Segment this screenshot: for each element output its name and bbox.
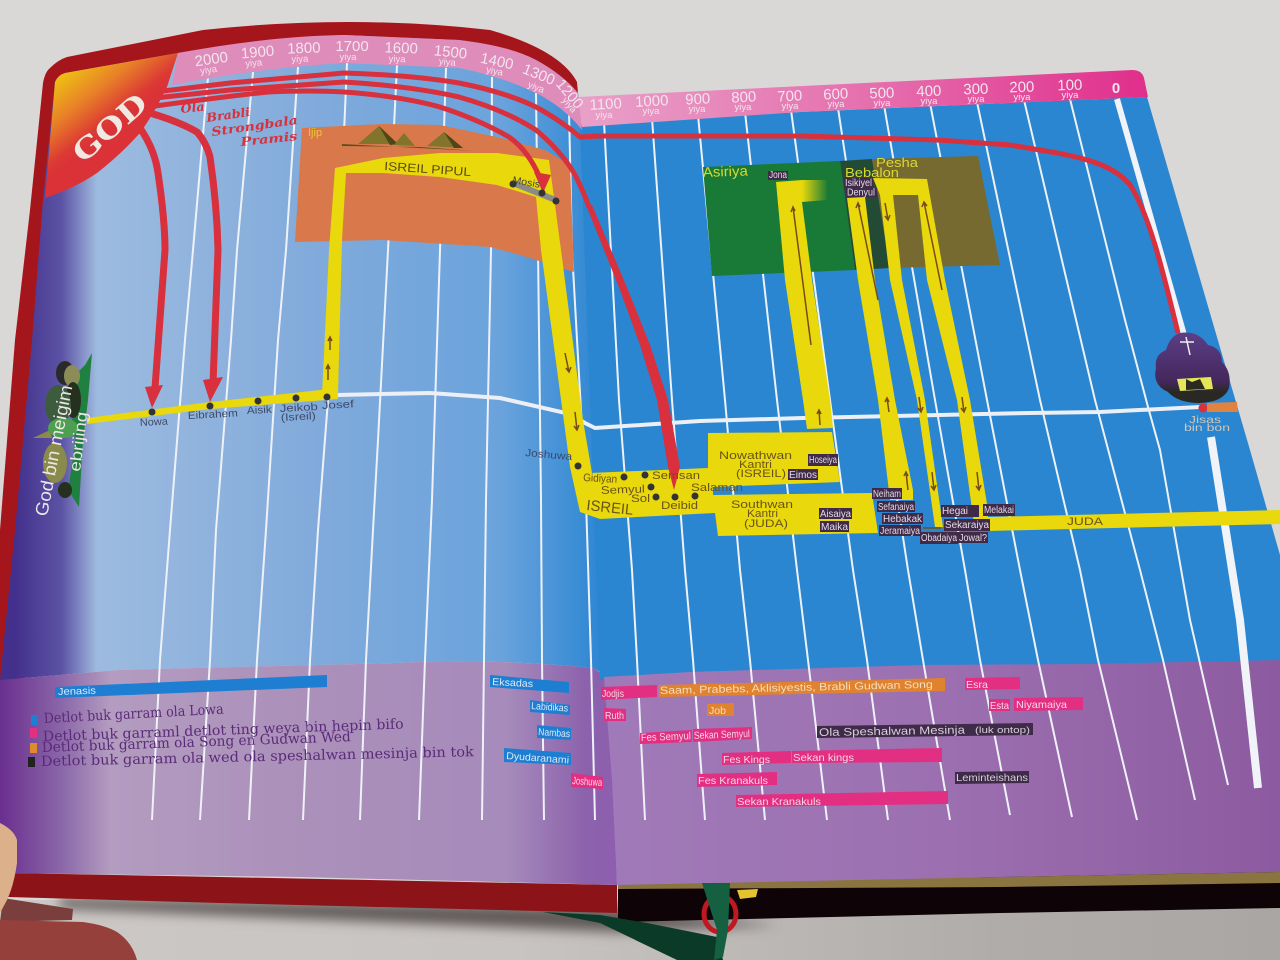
icon: trees with Creation label: ebrijing xyxy=(67,411,91,472)
prophet tags: Aisaiya xyxy=(820,509,851,520)
year labels right page: yiya xyxy=(1062,90,1079,101)
year labels left page: yiya xyxy=(291,54,309,65)
year labels left page: 1800 xyxy=(287,39,321,58)
label: Jisas bin bon: Jisas xyxy=(1189,414,1221,426)
label: Southwan Kantri: (JUDA) xyxy=(744,518,788,530)
pink years band right xyxy=(578,70,1148,127)
judges and kings dots and names: ISREIL xyxy=(586,497,634,519)
patriarch dots and names: Eibrahem xyxy=(188,407,238,422)
label: Southwan Kantri: Kantri xyxy=(747,508,778,520)
book bar: Esra: Esra xyxy=(966,679,988,691)
book bar: Ola Speshalwan Mesinja: Ola Speshalwan Mesinja xyxy=(819,724,966,739)
label: Southwan Kantri: Southwan xyxy=(731,499,793,511)
year labels left page: 1500 xyxy=(433,42,468,63)
book bar: Fes Kranakuls xyxy=(697,772,777,787)
prophet tags: Sekaraiya xyxy=(945,520,989,531)
legend: history books: Detlot buk garraml detlot ting weya bin hepin bifo xyxy=(43,716,404,745)
red arrow: to Deibid xyxy=(155,82,680,490)
year labels left page: yiya xyxy=(245,57,263,70)
label: Nowathwan Kantri: (ISREIL) xyxy=(736,468,786,480)
prophet tags: Maika xyxy=(821,522,848,533)
book bar: Eksadas: Eksadas xyxy=(492,677,533,690)
patriarch dots and names xyxy=(140,394,354,429)
year labels right page: yiya xyxy=(921,96,938,107)
judges and kings dots and names: Deibid xyxy=(661,500,698,512)
year labels right page: 1000 xyxy=(635,92,669,111)
panel: Egypt orange region xyxy=(295,124,574,272)
year labels left page: yiya xyxy=(388,54,406,65)
label: ISREIL PIPUL: ISREIL PIPUL xyxy=(384,159,472,179)
yellow path: exile column xyxy=(847,197,913,500)
year labels right page: yiya xyxy=(874,98,891,109)
year labels left page xyxy=(194,38,587,116)
patriarch dots and names: Jeikob xyxy=(280,401,318,415)
label: Jisas bin bon xyxy=(1184,414,1230,434)
year labels left page: yiya xyxy=(526,79,546,96)
book shadow xyxy=(60,898,780,932)
book bar: Nambas: Nambas xyxy=(538,727,570,740)
year labels right page: 100 xyxy=(1057,77,1083,94)
prophet tags: Melakai xyxy=(984,505,1014,516)
book bar: Fes Kranakuls: Fes Kranakuls xyxy=(698,775,768,787)
year labels right page: yiya xyxy=(689,104,706,115)
icon: pyramids xyxy=(342,126,476,151)
book bar: Fes Kings xyxy=(722,751,791,766)
Mosis marker xyxy=(510,175,560,204)
judges and kings dots and names: Salaman xyxy=(691,482,743,494)
book bar: Sekan Semyul: Sekan Semyul xyxy=(694,728,750,742)
Mosis marker: Mosis xyxy=(511,175,541,191)
right page xyxy=(580,97,1280,885)
year labels right page: 900 xyxy=(685,90,711,109)
year labels right page: yiya xyxy=(643,106,660,117)
judges and kings dots and names: Semyul xyxy=(601,483,645,497)
year labels right page: yiya xyxy=(782,101,799,112)
icon: nativity scene xyxy=(1155,332,1230,403)
label: Nowathwan Kantri xyxy=(719,450,792,480)
prophet tags: Sefanaiya xyxy=(878,502,914,513)
panel: Pesha olive region xyxy=(872,156,1000,268)
patriarch dots and names: Josef xyxy=(322,398,354,412)
year labels right page: 600 xyxy=(823,85,849,104)
labels: covenant words: Pramis xyxy=(239,129,298,149)
panel: Bebalon dark region xyxy=(840,159,890,270)
God corner xyxy=(45,53,178,198)
legend: songs and wisdom: Detlot buk garram ola Song en Gudwan Wed xyxy=(42,729,351,756)
book bar: Ola Speshalwan Mesinja: (luk ontop) xyxy=(975,725,1030,736)
prophet tags: Neiham xyxy=(873,489,901,500)
year labels right page: 700 xyxy=(777,87,803,106)
patriarch dots and names: Aisik xyxy=(247,404,273,417)
timeline grid lines xyxy=(152,63,1228,820)
year labels right page: 1100 xyxy=(589,95,622,114)
book bar: Jodjis: Jodjis xyxy=(602,688,624,700)
yellow timeline: creation to Josef xyxy=(87,390,338,424)
book bar: Sekan kings xyxy=(792,748,942,764)
year labels right page: yiya xyxy=(596,110,613,121)
label: Nowathwan Kantri: Nowathwan xyxy=(719,450,792,462)
prophet tags: Hegai xyxy=(942,506,968,517)
year labels right page: 0 xyxy=(1112,80,1120,97)
heading: GOD: GOD xyxy=(66,87,154,169)
book bar: Sekan kings: Sekan kings xyxy=(793,752,854,764)
red arrow: to Mosis xyxy=(155,91,551,193)
book bar: Niyamaiya xyxy=(1014,697,1083,711)
book bar: Esta: Esta xyxy=(990,700,1009,712)
book bar: Esra xyxy=(965,677,1020,691)
year zero thick line xyxy=(1117,99,1258,788)
red arrow: Brabli to Eibrahem xyxy=(150,113,223,402)
book bar: Ola Speshalwan Mesinja xyxy=(817,723,1033,739)
book bar: Leminteishans: Leminteishans xyxy=(956,772,1028,784)
book bar: Fes Semyul: Fes Semyul xyxy=(641,730,691,744)
left page xyxy=(0,35,617,885)
book bar: Job: Job xyxy=(709,705,726,717)
label: Pesha: Pesha xyxy=(876,155,919,170)
year labels right page: yiya xyxy=(968,94,985,105)
prophet tags: Hoseiya xyxy=(809,455,837,466)
prophet tags: Isikiyel xyxy=(845,178,872,189)
icon: trees with Creation label: God bin meigim xyxy=(31,383,76,518)
year labels right page: yiya xyxy=(828,99,845,110)
book bar: Jenasis: Jenasis xyxy=(58,686,96,698)
label: Nowathwan Kantri: Kantri xyxy=(739,459,772,471)
yellow path: to Asiriya xyxy=(776,180,833,429)
book bar: Sekan Kranakuls xyxy=(736,791,948,808)
label: JUDA: JUDA xyxy=(1067,516,1104,528)
red left cover xyxy=(0,22,582,700)
year labels right page: yiya xyxy=(1014,92,1031,103)
year labels left page: 1600 xyxy=(384,39,418,58)
year labels left page: 1300 xyxy=(520,61,557,89)
patriarch dots and names: Nowa xyxy=(140,416,168,429)
book bar: Joshuwa xyxy=(571,773,603,789)
year labels left page: 1700 xyxy=(335,38,369,55)
prophet tags: Jowal? xyxy=(959,533,987,544)
book bar: Jodjis xyxy=(601,685,657,700)
year labels right page: 200 xyxy=(1009,79,1035,96)
yellow path: return arch xyxy=(873,178,988,531)
direction arrows xyxy=(326,202,981,490)
hand holding the book xyxy=(0,823,137,960)
prophet tags: Jona xyxy=(769,170,787,181)
judges and kings dots and names xyxy=(525,447,743,519)
book bar: Sekan Kranakuls: Sekan Kranakuls xyxy=(737,796,821,808)
labels: covenant words: Ola xyxy=(180,100,205,116)
label: Asiriya: Asiriya xyxy=(703,162,748,180)
book bar: Job xyxy=(707,703,734,717)
book bar: wisdom books: Saam, Prabebs, Aklisiyestis, Brabli Gudwan Song xyxy=(660,679,933,697)
book bar: Labidikas: Labidikas xyxy=(531,701,568,715)
book bar: Ruth: Ruth xyxy=(605,710,624,722)
yellow path: Juda bar xyxy=(988,510,1280,531)
icon: trees with Creation label xyxy=(31,353,92,518)
labels: covenant words: Strongbala xyxy=(210,113,299,139)
year labels left page: yiya xyxy=(559,95,579,116)
label: Southwan Kantri xyxy=(731,499,793,530)
book bar: Dyudaranami: Dyudaranami xyxy=(506,751,569,766)
book bar: Jenasis xyxy=(55,675,327,698)
judges and kings dots and names: Sol xyxy=(631,493,650,505)
prophet tags: Jeramaiya xyxy=(880,526,920,537)
judges and kings dots and names: Gidiyan xyxy=(583,472,617,486)
prophet tags: Obadaiya xyxy=(921,533,957,544)
small connector arrow xyxy=(923,527,941,529)
patriarch dots and names: (Isreil) xyxy=(281,410,316,424)
panel: Asiriya green region xyxy=(703,161,855,276)
labels: covenant words xyxy=(180,100,299,149)
white horizontal timeline xyxy=(337,393,1200,428)
label: Jisas bin bon: bin bon xyxy=(1184,422,1230,434)
labels: covenant words: Brabli xyxy=(204,105,251,125)
label: Bebalon: Bebalon xyxy=(845,165,899,180)
yellow path: Isreil pipul arch xyxy=(322,153,878,536)
legend xyxy=(28,702,475,770)
red arrow: to Jisas xyxy=(155,73,1178,333)
year labels right page: yiya xyxy=(735,102,752,113)
red arrow: Ola to Nowa xyxy=(140,128,165,408)
legend: law books: Detlot buk garram ola Lowa xyxy=(43,702,224,727)
year labels left page: yiya xyxy=(438,56,457,69)
year labels right page: 300 xyxy=(963,81,989,98)
God gradient corner xyxy=(45,53,178,198)
ribbon bookmarks xyxy=(543,883,758,960)
year labels right page: 800 xyxy=(731,88,757,107)
Jisas birth marker xyxy=(1198,402,1238,412)
book bar: Fes Kings: Fes Kings xyxy=(723,754,770,766)
right page purple field xyxy=(604,660,1280,885)
prophet tags: Hebakak xyxy=(883,514,923,525)
prophet tags: Eimos xyxy=(789,470,817,481)
year labels left page: yiya xyxy=(340,52,357,63)
right page blue field xyxy=(580,97,1280,680)
judges and kings dots and names: Semsan xyxy=(652,470,700,482)
red cover bottom edge xyxy=(8,873,617,913)
label: Ijip: Ijip xyxy=(308,127,322,139)
year labels left page: 1400 xyxy=(479,50,515,73)
year labels left page: 2000 xyxy=(194,49,229,70)
year labels left page: yiya xyxy=(200,64,218,77)
year labels left page: yiya xyxy=(485,64,505,79)
table lower tone xyxy=(0,900,1280,960)
dark book block and cover on the right xyxy=(618,870,1280,922)
year labels right page: 500 xyxy=(869,85,895,102)
book bar: Eksadas xyxy=(490,675,569,693)
legend: prophets: Detlot buk garram ola wed ola speshalwan mesinja bin tok xyxy=(41,744,475,770)
left page purple field xyxy=(0,661,617,885)
prophet tags xyxy=(768,170,1015,544)
left page blue field xyxy=(0,35,605,680)
prophet tags: Denyul xyxy=(847,188,875,198)
judges and kings dots and names: Joshuwa xyxy=(525,447,573,463)
yellow fade into Asiriya xyxy=(802,180,827,202)
book bar: Niyamaiya: Niyamaiya xyxy=(1016,699,1067,711)
year labels right page xyxy=(589,77,1120,121)
pink years band left xyxy=(172,35,582,130)
year labels left page: 1200 xyxy=(552,76,587,112)
book bar: Joshuwa: Joshuwa xyxy=(572,775,603,789)
year labels left page: 1900 xyxy=(240,43,275,62)
year labels right page: 400 xyxy=(916,83,942,100)
